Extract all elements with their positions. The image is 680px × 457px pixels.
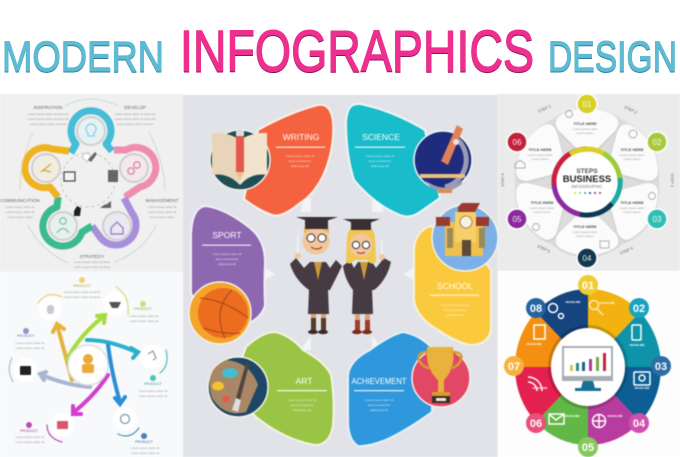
blob: art: Lorem ipsum dolor sit: [288, 398, 316, 402]
blob: sport: amet consectetur: [215, 257, 239, 261]
panel: five-lobe process diagram: Lorem ipsum dolor sit amet: [74, 260, 110, 264]
panel: arrows diagram: Lorem ipsum dolor sit: [16, 435, 44, 439]
panel: arrows diagram: Lorem ipsum dolor sit: [131, 451, 160, 455]
arrows: [40, 315, 138, 414]
panel: five-lobe process diagram: Lorem ipsum dolor sit amet elit: [28, 117, 69, 121]
segment captions: HEADLINE: [526, 342, 542, 346]
panel: six steps business: 05: [513, 215, 522, 224]
panel: six steps business: Lorem ipsum: [533, 210, 551, 214]
titles: TITLE HERE: [530, 200, 554, 205]
titles: TITLE HERE: [573, 224, 597, 229]
panel: arrows diagram: Lorem ipsum dolor sit: [130, 319, 158, 323]
center text: STEPS: [576, 168, 598, 175]
item labels: PRODUCT: [135, 440, 154, 444]
blob: achievement: Lorem ipsum dolor sit: [365, 398, 394, 402]
labels: MANAGEMENT: [146, 198, 179, 203]
labels: DEVELOP: [124, 105, 146, 110]
blob: science: [346, 104, 440, 216]
step labels: STEP 1: [537, 103, 552, 114]
hub: [68, 345, 108, 385]
labels: [0, 105, 179, 259]
icon: microscope: [414, 125, 472, 193]
central dashed circle and icons: [61, 153, 115, 207]
item icons: [13, 292, 164, 437]
segment captions: HEADLINE: [599, 301, 615, 305]
item labels: PRODUCT: [73, 284, 92, 288]
segment icons: [528, 300, 650, 428]
panel: six steps business: Lorem ipsum dolor: [528, 153, 552, 157]
title: MODERN: [2, 33, 164, 81]
panel: six steps business: Lorem ipsum: [623, 157, 641, 161]
panel: five-lobe process diagram: Lorem ipsum dolor sit: [148, 210, 176, 214]
blob: art: [230, 332, 334, 445]
blob: achievement: amet consectetur: [367, 403, 391, 407]
segment captions: HEADLINE: [532, 386, 548, 390]
illustration: graduate boy: [290, 217, 342, 334]
step labels: STEP 6: [500, 172, 505, 187]
item labels: PRODUCT: [20, 429, 39, 433]
item labels: [17, 277, 163, 444]
panel: eight segment wheel: [498, 271, 680, 457]
step labels: STEP 5: [536, 243, 552, 254]
number badges: [504, 275, 671, 457]
blob: art: adipiscing elit: [293, 408, 311, 412]
panel: five-lobe process diagram: Lorem ipsum dolor sit amet elit: [115, 117, 156, 121]
panel: five-lobe process diagram: Lorem ipsum dolor sit: [6, 210, 34, 214]
icon: monitor with bars: [563, 347, 612, 391]
blob: writing: WRITING: [283, 132, 319, 142]
blob: achievement: adipiscing elit: [370, 408, 388, 412]
blob: achievement: [348, 332, 432, 446]
panel: eight segment wheel: 05: [582, 442, 594, 454]
panel: five-lobe process diagram: Lorem ipsum dolor sit: [148, 205, 176, 209]
hub icon: [82, 354, 94, 373]
colour dots: [574, 192, 601, 194]
icon: basketball: [189, 282, 251, 344]
illustration: graduate girl: [343, 219, 391, 334]
panel: arrows diagram: Lorem ipsum dolor sit amet: [64, 295, 100, 299]
item labels: PRODUCT: [134, 307, 153, 311]
blob: writing: amet consectetur: [288, 159, 312, 163]
center text: BUSINESS: [563, 174, 611, 185]
panel: five-lobe process diagram: Lorem ipsum dolor sit amet: [30, 122, 66, 126]
blob: writing: adipiscing elit: [291, 164, 309, 168]
segment captions: HEADLINE: [564, 414, 580, 418]
hub: [554, 149, 620, 215]
labels: COMMUNICATION: [0, 198, 40, 203]
panel: arrows diagram: Lorem ipsum dolor sit: [139, 389, 168, 393]
panel: arrows diagram: Lorem ipsum dolor sit: [16, 341, 44, 345]
lobes ring: [25, 111, 156, 246]
blob: school: SCHOOL: [437, 281, 473, 291]
step labels: [500, 103, 675, 256]
titles: TITLE HERE: [620, 200, 644, 205]
blob: school: amet consectetur: [443, 308, 467, 312]
hub: [548, 325, 628, 409]
segment captions: HEADLINE: [629, 343, 645, 347]
panel: five-lobe process diagram: Lorem ipsum dolor: [8, 215, 32, 219]
blob: science: adipiscing elit: [371, 164, 389, 168]
labels: STRATEGY: [80, 254, 104, 259]
blob: writing: Lorem ipsum dolor sit: [286, 154, 314, 158]
panel: six steps business: 06: [513, 138, 522, 147]
panel: arrows diagram: Lorem ipsum dolor sit: [139, 394, 168, 398]
blob: school: adipiscing elit: [446, 313, 464, 317]
item labels: PRODUCT: [144, 382, 163, 386]
blob: sport: [191, 206, 265, 330]
panel: six steps business: 01: [583, 100, 592, 109]
panel: six steps business: Lorem ipsum: [531, 157, 549, 161]
panel: five-lobe process diagram: Lorem ipsum dolor sit: [6, 205, 34, 209]
titles: TITLE HERE: [528, 147, 552, 152]
step labels: STEP 2: [623, 104, 639, 115]
panel: arrows diagram: [0, 272, 184, 457]
panel: eight segment wheel: 01: [582, 280, 594, 292]
panel: six steps business: Lorem ipsum: [576, 234, 594, 238]
grey bands: [515, 114, 659, 250]
colour ring: [554, 149, 620, 215]
segment captions: HEADLINE: [565, 300, 581, 304]
panel: six steps business: 02: [653, 138, 662, 147]
lobe icons: [32, 117, 148, 240]
blob: writing: [244, 105, 333, 216]
icon: trophy: [412, 347, 470, 407]
cycle arrows: [20, 99, 165, 263]
panel: arrows diagram: Lorem ipsum dolor sit amet: [64, 290, 100, 294]
blob: sport: Lorem ipsum dolor sit: [213, 252, 242, 256]
blob: science: Lorem ipsum dolor sit: [366, 154, 394, 158]
blob: science: amet consectetur: [368, 159, 392, 163]
blob: sport: adipiscing elit: [218, 262, 236, 266]
icon: book and pencil: [210, 130, 270, 190]
icon: palette: [208, 357, 268, 417]
panel: five-lobe process diagram: Lorem ipsum dolor sit amet elit: [28, 112, 69, 116]
panel: eight segment wheel: 04: [633, 418, 646, 430]
item labels: PRODUCT: [17, 334, 36, 338]
petals: [508, 108, 666, 256]
step labels: STEP 3: [670, 173, 675, 188]
panel: arrows diagram: Lorem ipsum dolor sit: [131, 446, 160, 450]
panel: six steps business: 04: [583, 254, 592, 263]
panel: six steps business: Lorem ipsum: [576, 131, 594, 135]
titles: TITLE HERE: [573, 121, 597, 126]
blob: sport: SPORT: [212, 230, 242, 240]
blob: school: [414, 226, 491, 345]
panel: six steps business: 03: [653, 215, 662, 224]
titles: TITLE HERE: [620, 147, 644, 152]
panel: eight segment wheel: 06: [530, 418, 542, 430]
panel: six steps business: Lorem ipsum: [623, 210, 641, 214]
panel: arrows diagram: Lorem ipsum dolor sit: [130, 314, 158, 318]
blob: art: amet consectetur: [290, 403, 314, 407]
titles: [528, 121, 644, 229]
panel: five-lobe process diagram: Lorem ipsum dolor sit amet elit: [115, 112, 156, 116]
panel: five-lobe process diagram: Lorem ipsum dolor sit amet: [74, 265, 110, 269]
panel: eight segment wheel: 08: [530, 303, 542, 315]
panel: arrows diagram: Lorem ipsum dolor sit: [16, 440, 44, 444]
step labels: STEP 4: [619, 245, 634, 256]
panel: eight segment wheel: 07: [508, 361, 520, 373]
blob: school: Lorem ipsum dolor sit: [441, 303, 470, 307]
panel: six steps business: Lorem ipsum dolor: [620, 206, 644, 210]
panel: five-lobe process diagram: Lorem ipsum dolor: [150, 215, 174, 219]
segment captions: HEADLINE: [634, 386, 650, 390]
panel: six steps business: Lorem ipsum dolor: [573, 127, 597, 131]
title: [2, 19, 677, 84]
panel: six steps business: Lorem ipsum dolor: [620, 153, 644, 157]
icon: school building: [432, 203, 498, 271]
labels: INSPIRATION: [33, 105, 63, 110]
panel: six steps business: Lorem ipsum dolor: [573, 230, 597, 234]
petal icons: [515, 110, 656, 248]
panel: arrows diagram: Lorem ipsum dolor sit: [16, 346, 44, 350]
blob: science: SCIENCE: [362, 132, 400, 142]
center text: INFOGRAPHIC: [571, 184, 603, 189]
panel: education infographic: [183, 95, 498, 457]
wheel segments: [515, 289, 661, 445]
panel: five-lobe process diagram: [0, 94, 184, 272]
panel: five-lobe process diagram: Lorem ipsum dolor sit amet: [117, 122, 153, 126]
step badges: [507, 94, 667, 268]
segment captions: [526, 300, 650, 418]
blob: achievement: ACHIEVEMENT: [352, 376, 406, 386]
segment captions: HEADLINE: [607, 414, 623, 418]
blob: art: ART: [296, 376, 312, 386]
center text: [563, 168, 611, 189]
panel: eight segment wheel: 03: [655, 361, 667, 373]
panel: six steps business: [498, 94, 680, 271]
panel: eight segment wheel: 02: [633, 303, 645, 315]
title: INFOGRAPHICS: [180, 19, 534, 84]
pointer wedges: [265, 198, 413, 350]
panel: six steps business: Lorem ipsum dolor: [530, 206, 554, 210]
